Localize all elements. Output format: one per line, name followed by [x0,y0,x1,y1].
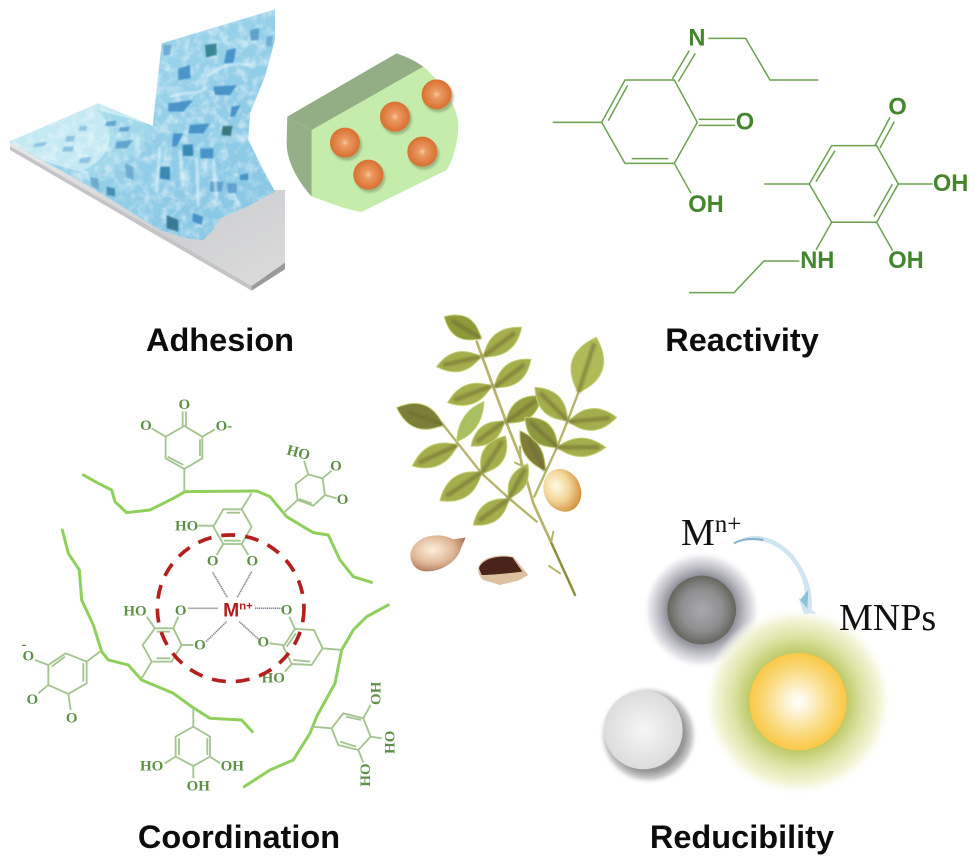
label: MNPs: MNPs [839,597,936,639]
peeling film on substrate [0,0,287,291]
leaf midribs [408,321,610,521]
illustration: plant branch with leaves and seeds [397,315,617,595]
ring substituent labels: O [140,418,152,434]
label: Mn+: M [681,512,715,554]
metal ion label: n+ [239,600,253,612]
ring substituent labels: O [23,649,34,665]
ring substituent labels: O [337,492,348,508]
ring substituent labels: OH [369,681,385,705]
ring substituent labels: O [281,603,292,619]
ring substituent labels: O- [216,419,232,435]
gold sphere [703,607,893,797]
ring substituent labels [21,397,399,795]
label: Mn+: n+ [715,511,741,538]
coordination bonds [188,572,282,642]
ring substituent labels: HO [383,731,399,754]
broken seed [478,556,528,585]
polymer chains [62,475,388,787]
molecule: amino quinone: OH [933,171,968,197]
molecule: imine quinone [553,25,818,218]
ring substituent labels: - [21,637,26,653]
molecule: amino quinone: OH [888,248,924,274]
ring substituent labels: O [178,397,190,413]
ring substituent labels: O [27,692,38,708]
ring substituent labels: HO [262,670,285,686]
ring substituent labels: HO [285,443,312,464]
ring substituent labels: O [194,638,206,654]
grey sphere [642,551,761,669]
heading: Coordination: Coordination [138,819,340,855]
molecule: amino quinone: NH [800,248,834,274]
whole seed [410,535,466,571]
white sphere [598,685,698,785]
molecule: imine quinone: O [736,109,754,135]
molecule: imine quinone: OH [688,192,724,218]
branches [443,342,578,595]
ring substituent labels: HO [123,604,147,620]
fruit on branch [536,463,588,518]
ring substituent labels: HO [175,519,198,535]
ring substituent labels: O [246,554,258,570]
phenol and quinone rings [35,412,382,778]
leaves [397,315,617,525]
molecule: amino quinone [689,95,968,293]
reduction arrow [734,536,817,614]
ring substituent labels: O [66,710,77,726]
ring substituent labels: O [207,554,218,570]
red dashed coordination circle [157,535,304,682]
molecule: amino quinone: O [888,95,907,121]
ring substituent labels: O [330,459,342,475]
ring substituent labels: OH [221,759,244,775]
ring substituent labels: HO [140,759,163,775]
heading: Adhesion: Adhesion [146,322,294,358]
heading: Reactivity: Reactivity [665,322,819,358]
metal ion label: M [223,601,239,622]
panel: adhesion illustration [0,0,458,291]
panel: reactivity molecules [553,25,968,293]
ring substituent labels: OH [187,779,210,795]
molecule: imine quinone: N [688,25,706,51]
green cutaway with orange particles [287,53,458,212]
ring substituent labels: HO [358,763,374,787]
panel: coordination network [21,397,399,795]
ring substituent labels: O [175,603,186,619]
panel: reducibility spheres [598,536,893,797]
heading: Reducibility: Reducibility [650,819,834,855]
ring substituent labels: O [257,635,269,651]
